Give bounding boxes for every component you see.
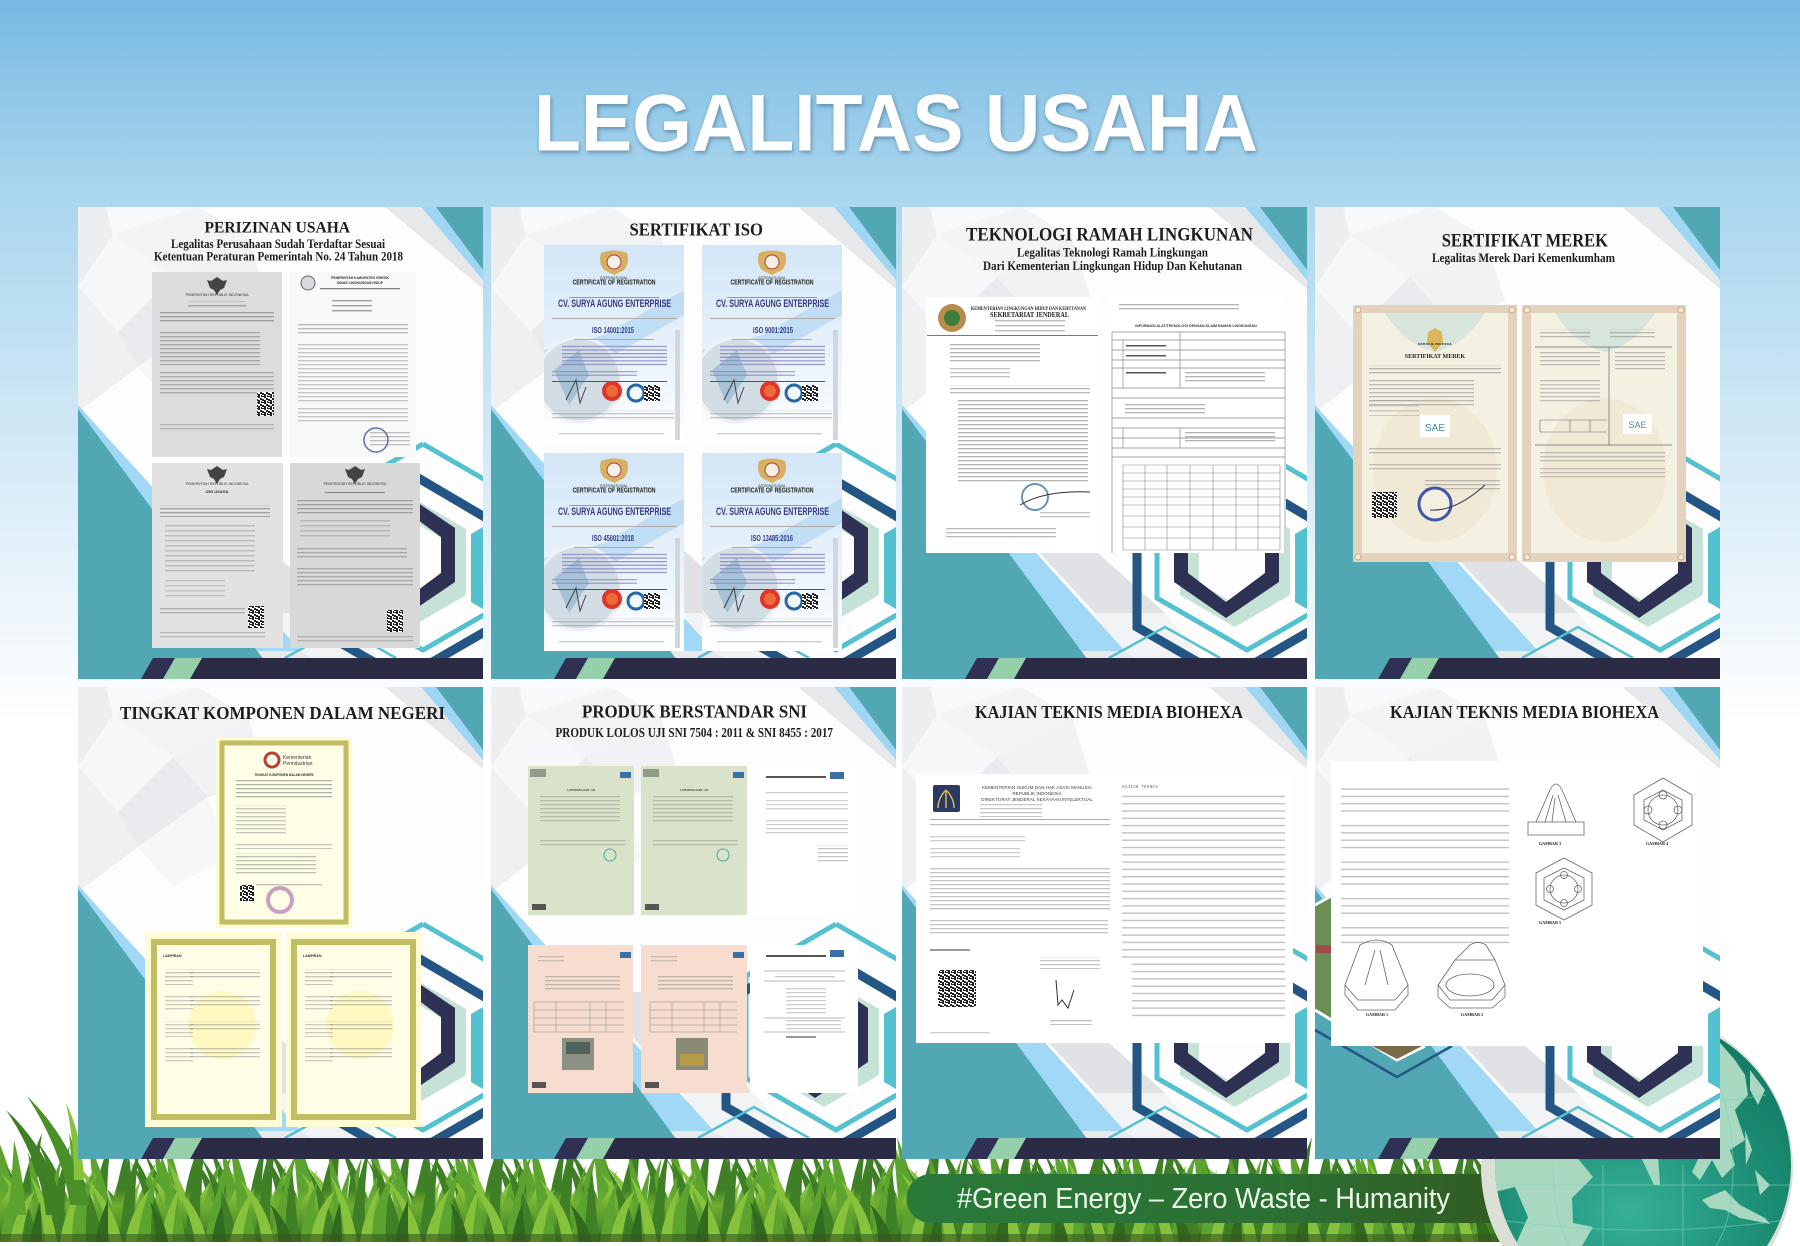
document: izin usaha — [152, 463, 283, 648]
certificate: iso 14001: ISO 14001:2015 — [592, 326, 634, 335]
subheading: perizinan: Ketentuan Peraturan Pemerintah No. 24 Tahun 2018 — [154, 250, 403, 264]
photo hexagon behind document — [1315, 895, 1452, 1077]
document: surat sekretariat jenderal — [926, 297, 1099, 553]
document: gambar teknik: GAMBAR 2 — [1461, 1012, 1483, 1017]
heading: kajian 1: KAJIAN TEKNIS MEDIA BIOHEXA — [975, 702, 1243, 722]
panel: teknologi ramah lingkungan — [902, 207, 1337, 679]
subheading: sni: PRODUK LOLOS UJI SNI 7504 : 2011 & SNI 8455 : 2017 — [556, 725, 833, 740]
certificate: iso 45001: CV. SURYA AGUNG ENTERPRISE — [558, 506, 671, 518]
icon: globe — [1481, 1036, 1793, 1246]
document: kajian letter and claims: DIREKTORAT JENDERAL KEKAYAAN INTELEKTUAL — [981, 797, 1093, 802]
document: laporan uji green 1 — [528, 766, 634, 915]
certificate: iso 14001 — [537, 245, 684, 443]
certificate: merek front: REPUBLIK INDONESIA — [1418, 342, 1453, 346]
document: gambar teknik: GAMBAR 3 — [1539, 841, 1561, 846]
certificate: iso 9001: CERTIFICATE OF REGISTRATION — [730, 280, 814, 286]
certificate: merek back: SAE — [1628, 420, 1647, 430]
document: gambar teknik: GAMBAR 5 — [1539, 920, 1561, 925]
panel: tingkat komponen dalam negeri — [78, 687, 513, 1159]
subheading: perizinan — [154, 237, 403, 264]
certificate: iso 14001: CERTIFICATE OF REGISTRATION — [572, 280, 656, 286]
certificate: iso 9001: ISO 9001:2015 — [753, 326, 793, 335]
document: izin usaha: PEMERINTAH REPUBLIK INDONESIA — [186, 482, 249, 486]
document: gambar teknik: GAMBAR 1 — [1366, 1012, 1388, 1017]
certificate: tkdn main: Perindustrian — [283, 761, 313, 767]
document: izin operasional: PEMERINTAH REPUBLIK INDONESIA — [324, 482, 387, 486]
document: surat uji white 1 — [754, 766, 858, 915]
document: kajian letter and claims: KEMENTERIAN HUKUM DAN HAK ASASI MANUSIA — [982, 785, 1093, 790]
certificate: iso 45001: CERTIFICATE OF REGISTRATION — [572, 488, 656, 494]
document: dinas lingkungan hidup — [290, 272, 416, 457]
heading: teknologi: TEKNOLOGI RAMAH LINGKUNAN — [966, 225, 1253, 246]
panel: kajian teknis gambar — [1315, 687, 1750, 1159]
slogan pill: #Green Energy – Zero Waste - Humanity — [957, 1183, 1450, 1215]
document: laporan uji green 1: LAPORAN HASIL UJI — [567, 788, 595, 792]
certificate: merek front: SAE — [1425, 423, 1445, 434]
heading: perizinan usaha: PERIZINAN USAHA — [204, 220, 350, 237]
document: surat sekretariat jenderal: SEKRETARIAT JENDERAL — [990, 310, 1069, 319]
subheading: merek: Legalitas Merek Dari Kemenkumham — [1432, 250, 1615, 265]
certificate: tkdn main: Kementerian — [283, 755, 312, 761]
grass strip — [0, 1075, 1590, 1242]
certificate: iso 45001: INTERNATIONAL — [600, 484, 628, 488]
certificate: iso 45001: ISO 45001:2018 — [592, 534, 634, 543]
heading: sertifikat merek: SERTIFIKAT MEREK — [1442, 230, 1608, 251]
document: surat uji white 2 — [750, 945, 858, 1093]
document: izin operasional — [290, 463, 420, 648]
certificate: merek front: SERTIFIKAT MEREK — [1405, 354, 1466, 360]
slogan pill — [906, 1174, 1530, 1223]
document: nomor induk berusaha — [152, 272, 282, 457]
certificate: merek back — [1522, 305, 1686, 562]
document: laporan uji pink 1 — [528, 945, 633, 1093]
heading: sni: PRODUK BERSTANDAR SNI — [582, 702, 807, 722]
document: dinas lingkungan hidup: DINAS LINGKUNGAN HIDUP — [337, 281, 384, 285]
document: kajian letter and claims: KAJIAN TEKNIS — [1122, 784, 1158, 790]
certificate: iso 13485: CERTIFICATE OF REGISTRATION — [730, 488, 814, 494]
document: gambar teknik: GAMBAR 4 — [1646, 841, 1669, 846]
certificate: iso 13485: INTERNATIONAL — [758, 484, 786, 488]
document: informasi alat teknologi — [1106, 297, 1286, 553]
document: kajian letter and claims — [916, 774, 1293, 1043]
certificate: tkdn lampiran 2 — [286, 932, 421, 1127]
document: surat sekretariat jenderal: KEMENTERIAN LINGKUNGAN HIDUP DAN KEHUTANAN — [971, 307, 1086, 312]
certificate: iso 45001 — [537, 453, 684, 651]
document: gambar teknik — [1331, 761, 1703, 1046]
certificate: iso 13485: CV. SURYA AGUNG ENTERPRISE — [716, 506, 829, 518]
heading: tkdn: TINGKAT KOMPONEN DALAM NEGERI — [120, 703, 445, 723]
document: laporan uji pink 2 — [641, 945, 747, 1093]
panel: produk berstandar sni — [491, 687, 926, 1159]
certificate: iso 9001: CV. SURYA AGUNG ENTERPRISE — [716, 298, 829, 310]
certificate: iso 9001: INTERNATIONAL — [758, 276, 786, 280]
document: laporan uji green 2: LAPORAN HASIL UJI — [680, 788, 708, 792]
panel: kajian teknis media biohexa — [902, 687, 1337, 1159]
heading: sertifikat iso: SERTIFIKAT ISO — [630, 220, 763, 240]
certificate: iso 13485 — [695, 453, 842, 651]
subheading: perizinan: Legalitas Perusahaan Sudah Terdaftar Sesuai — [171, 237, 385, 251]
subheading: teknologi — [983, 245, 1243, 273]
certificate: tkdn main — [216, 737, 352, 928]
certificate: tkdn lampiran 1 — [145, 932, 282, 1127]
document: laporan uji green 2 — [641, 766, 747, 915]
heading: kajian 2: KAJIAN TEKNIS MEDIA BIOHEXA — [1390, 702, 1659, 722]
certificate: iso 14001: INTERNATIONAL — [600, 276, 628, 280]
document: dinas lingkungan hidup: PEMERINTAH KABUPATEN GRESIK — [331, 276, 389, 280]
certificate: tkdn main: TINGKAT KOMPONEN DALAM NEGERI — [254, 773, 314, 777]
subheading: teknologi: Legalitas Teknologi Ramah Lingkungan — [1017, 245, 1209, 260]
panel: sertifikat iso — [491, 207, 926, 679]
certificate: iso 13485: ISO 13485:2016 — [751, 534, 793, 543]
panel: perizinan usaha — [78, 207, 513, 679]
document: kajian letter and claims: REPUBLIK INDONESIA — [1012, 791, 1063, 796]
certificate: tkdn lampiran 2: LAMPIRAN — [303, 954, 322, 958]
panel: sertifikat merek — [1315, 207, 1750, 679]
certificate: iso 9001 — [695, 245, 842, 443]
document: izin usaha: IZIN USAHA — [206, 489, 229, 494]
subheading: teknologi: Dari Kementerian Lingkungan Hidup Dan Kehutanan — [983, 258, 1243, 273]
document: informasi alat teknologi: INFORMASI ALAT/TEKNOLOGI DENGAN KLAIM RAMAH LINGKUNGAN — [1135, 324, 1257, 328]
certificate: iso 14001: CV. SURYA AGUNG ENTERPRISE — [558, 298, 671, 310]
certificate: tkdn lampiran 1: LAMPIRAN — [163, 954, 182, 958]
certificate: merek front — [1353, 305, 1517, 562]
main title: LEGALITAS USAHA — [534, 78, 1258, 168]
document: nomor induk berusaha: PEMERINTAH REPUBLIK INDONESIA — [186, 293, 249, 297]
